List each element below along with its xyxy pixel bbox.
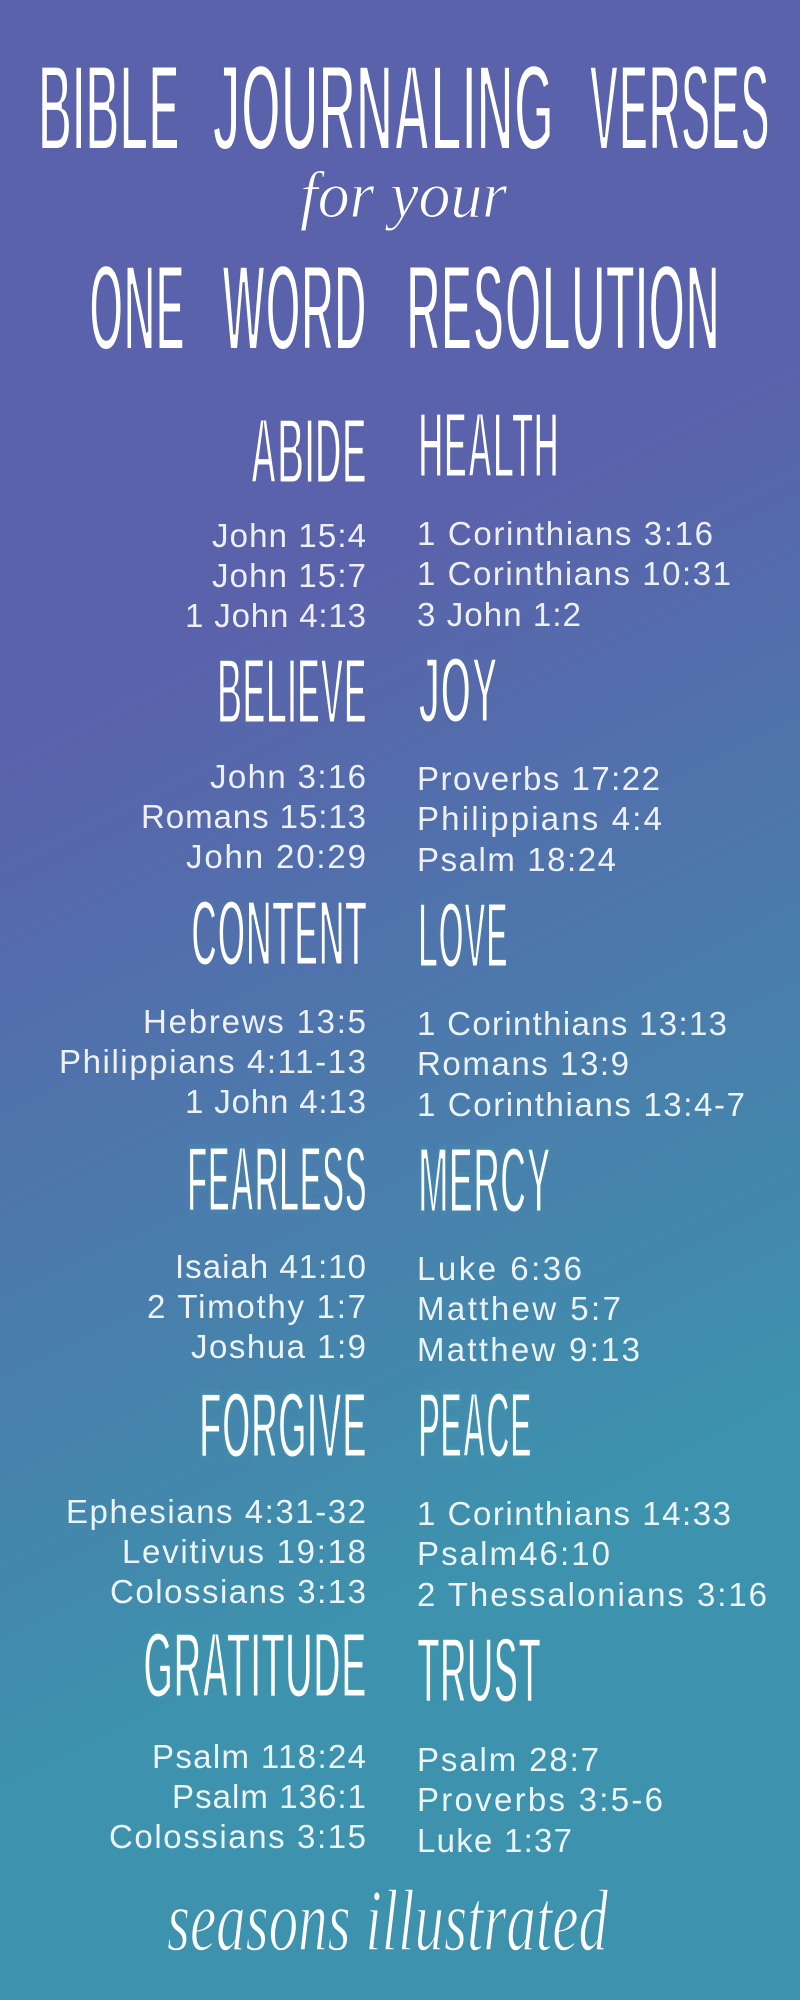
verses: content: Philippians 4:11-13	[59, 1043, 366, 1080]
text: FEARLESS	[187, 1126, 367, 1233]
title line 3: WORD	[222, 239, 367, 378]
text: BELIEVE	[217, 638, 367, 745]
word block: forgive	[66, 1372, 367, 1610]
word block: abide	[185, 398, 367, 634]
verses: peace: 2 Thessalonians 3:16	[417, 1576, 767, 1613]
word block: health	[417, 392, 731, 633]
verses: fearless: 2 Timothy 1:7	[147, 1288, 366, 1325]
verses: love	[417, 1005, 745, 1123]
verses: gratitude	[109, 1738, 366, 1855]
verses: trust: Luke 1:37	[417, 1822, 572, 1859]
title line 1: BIBLE	[38, 39, 180, 178]
verses: gratitude: Psalm 118:24	[152, 1738, 366, 1775]
verses: joy: Proverbs 17:22	[417, 760, 660, 797]
verses: content: 1 John 4:13	[185, 1083, 366, 1120]
verses: believe: Romans 15:13	[141, 798, 366, 835]
title block	[38, 39, 770, 378]
verses: forgive: Colossians 3:13	[110, 1573, 366, 1610]
verses: joy: Psalm 18:24	[417, 841, 616, 878]
verses: peace	[417, 1495, 767, 1613]
verses: gratitude: Colossians 3:15	[109, 1818, 366, 1855]
word block: love: LOVE	[418, 882, 508, 989]
text: GRATITUDE	[143, 1612, 367, 1719]
verses: mercy: Matthew 5:7	[417, 1290, 621, 1327]
text: FORGIVE	[199, 1372, 367, 1479]
verses: trust	[417, 1741, 663, 1859]
verses: love: 1 Corinthians 13:4-7	[417, 1086, 745, 1123]
verses: health: 1 Corinthians 3:16	[417, 515, 713, 552]
verses: peace: Psalm46:10	[417, 1535, 610, 1572]
title line 3	[89, 239, 720, 378]
word block: joy: JOY	[418, 637, 498, 744]
verses: content: Hebrews 13:5	[143, 1003, 366, 1040]
verses: mercy: Luke 6:36	[417, 1250, 582, 1287]
title line 2: script: for your	[300, 159, 507, 232]
verses: abide: 1 John 4:13	[185, 597, 366, 634]
verses: fearless	[147, 1248, 366, 1365]
word block: gratitude	[109, 1612, 367, 1855]
verses: abide	[185, 517, 366, 634]
verses: believe	[141, 758, 366, 875]
title line 3: ONE	[89, 239, 185, 378]
word block: mercy	[417, 1127, 640, 1368]
verses: forgive: Levitivus 19:18	[122, 1533, 366, 1570]
verses: forgive: Ephesians 4:31-32	[66, 1493, 366, 1530]
verses: love: Romans 13:9	[417, 1045, 629, 1082]
verses: abide: John 15:4	[212, 517, 366, 554]
verses: joy: Philippians 4:4	[417, 800, 662, 837]
word block: peace: PEACE	[418, 1372, 532, 1479]
verses: gratitude: Psalm 136:1	[172, 1778, 366, 1815]
word block: peace	[417, 1372, 767, 1613]
word block: believe	[141, 638, 367, 875]
verses: mercy	[417, 1250, 640, 1368]
verses: peace: 1 Corinthians 14:33	[417, 1495, 731, 1532]
verses: trust: Psalm 28:7	[417, 1741, 599, 1778]
text: ABIDE	[250, 398, 367, 505]
word block: trust: TRUST	[417, 1617, 541, 1724]
verses: joy	[417, 760, 662, 878]
word block: content	[59, 880, 367, 1120]
verses: abide: John 15:7	[212, 557, 366, 594]
verses: trust: Proverbs 3:5-6	[417, 1781, 663, 1818]
word block: mercy: MERCY	[418, 1127, 551, 1234]
verses: believe: John 20:29	[186, 838, 366, 875]
verses: health	[417, 515, 731, 633]
text: CONTENT	[191, 880, 367, 987]
verses: fearless: Isaiah 41:10	[175, 1248, 366, 1285]
verses: believe: John 3:16	[210, 758, 366, 795]
word block: health: HEALTH	[418, 392, 559, 499]
verses: content	[59, 1003, 366, 1120]
word block: joy	[417, 637, 662, 878]
word block: fearless	[147, 1126, 367, 1365]
verses: health: 1 Corinthians 10:31	[417, 555, 731, 592]
verses: forgive	[66, 1493, 366, 1610]
verses: love: 1 Corinthians 13:13	[417, 1005, 727, 1042]
word block: trust	[417, 1617, 663, 1859]
word block: love	[417, 882, 745, 1123]
verses: mercy: Matthew 9:13	[417, 1331, 640, 1368]
verses: health: 3 John 1:2	[417, 596, 581, 633]
verses: fearless: Joshua 1:9	[191, 1328, 366, 1365]
